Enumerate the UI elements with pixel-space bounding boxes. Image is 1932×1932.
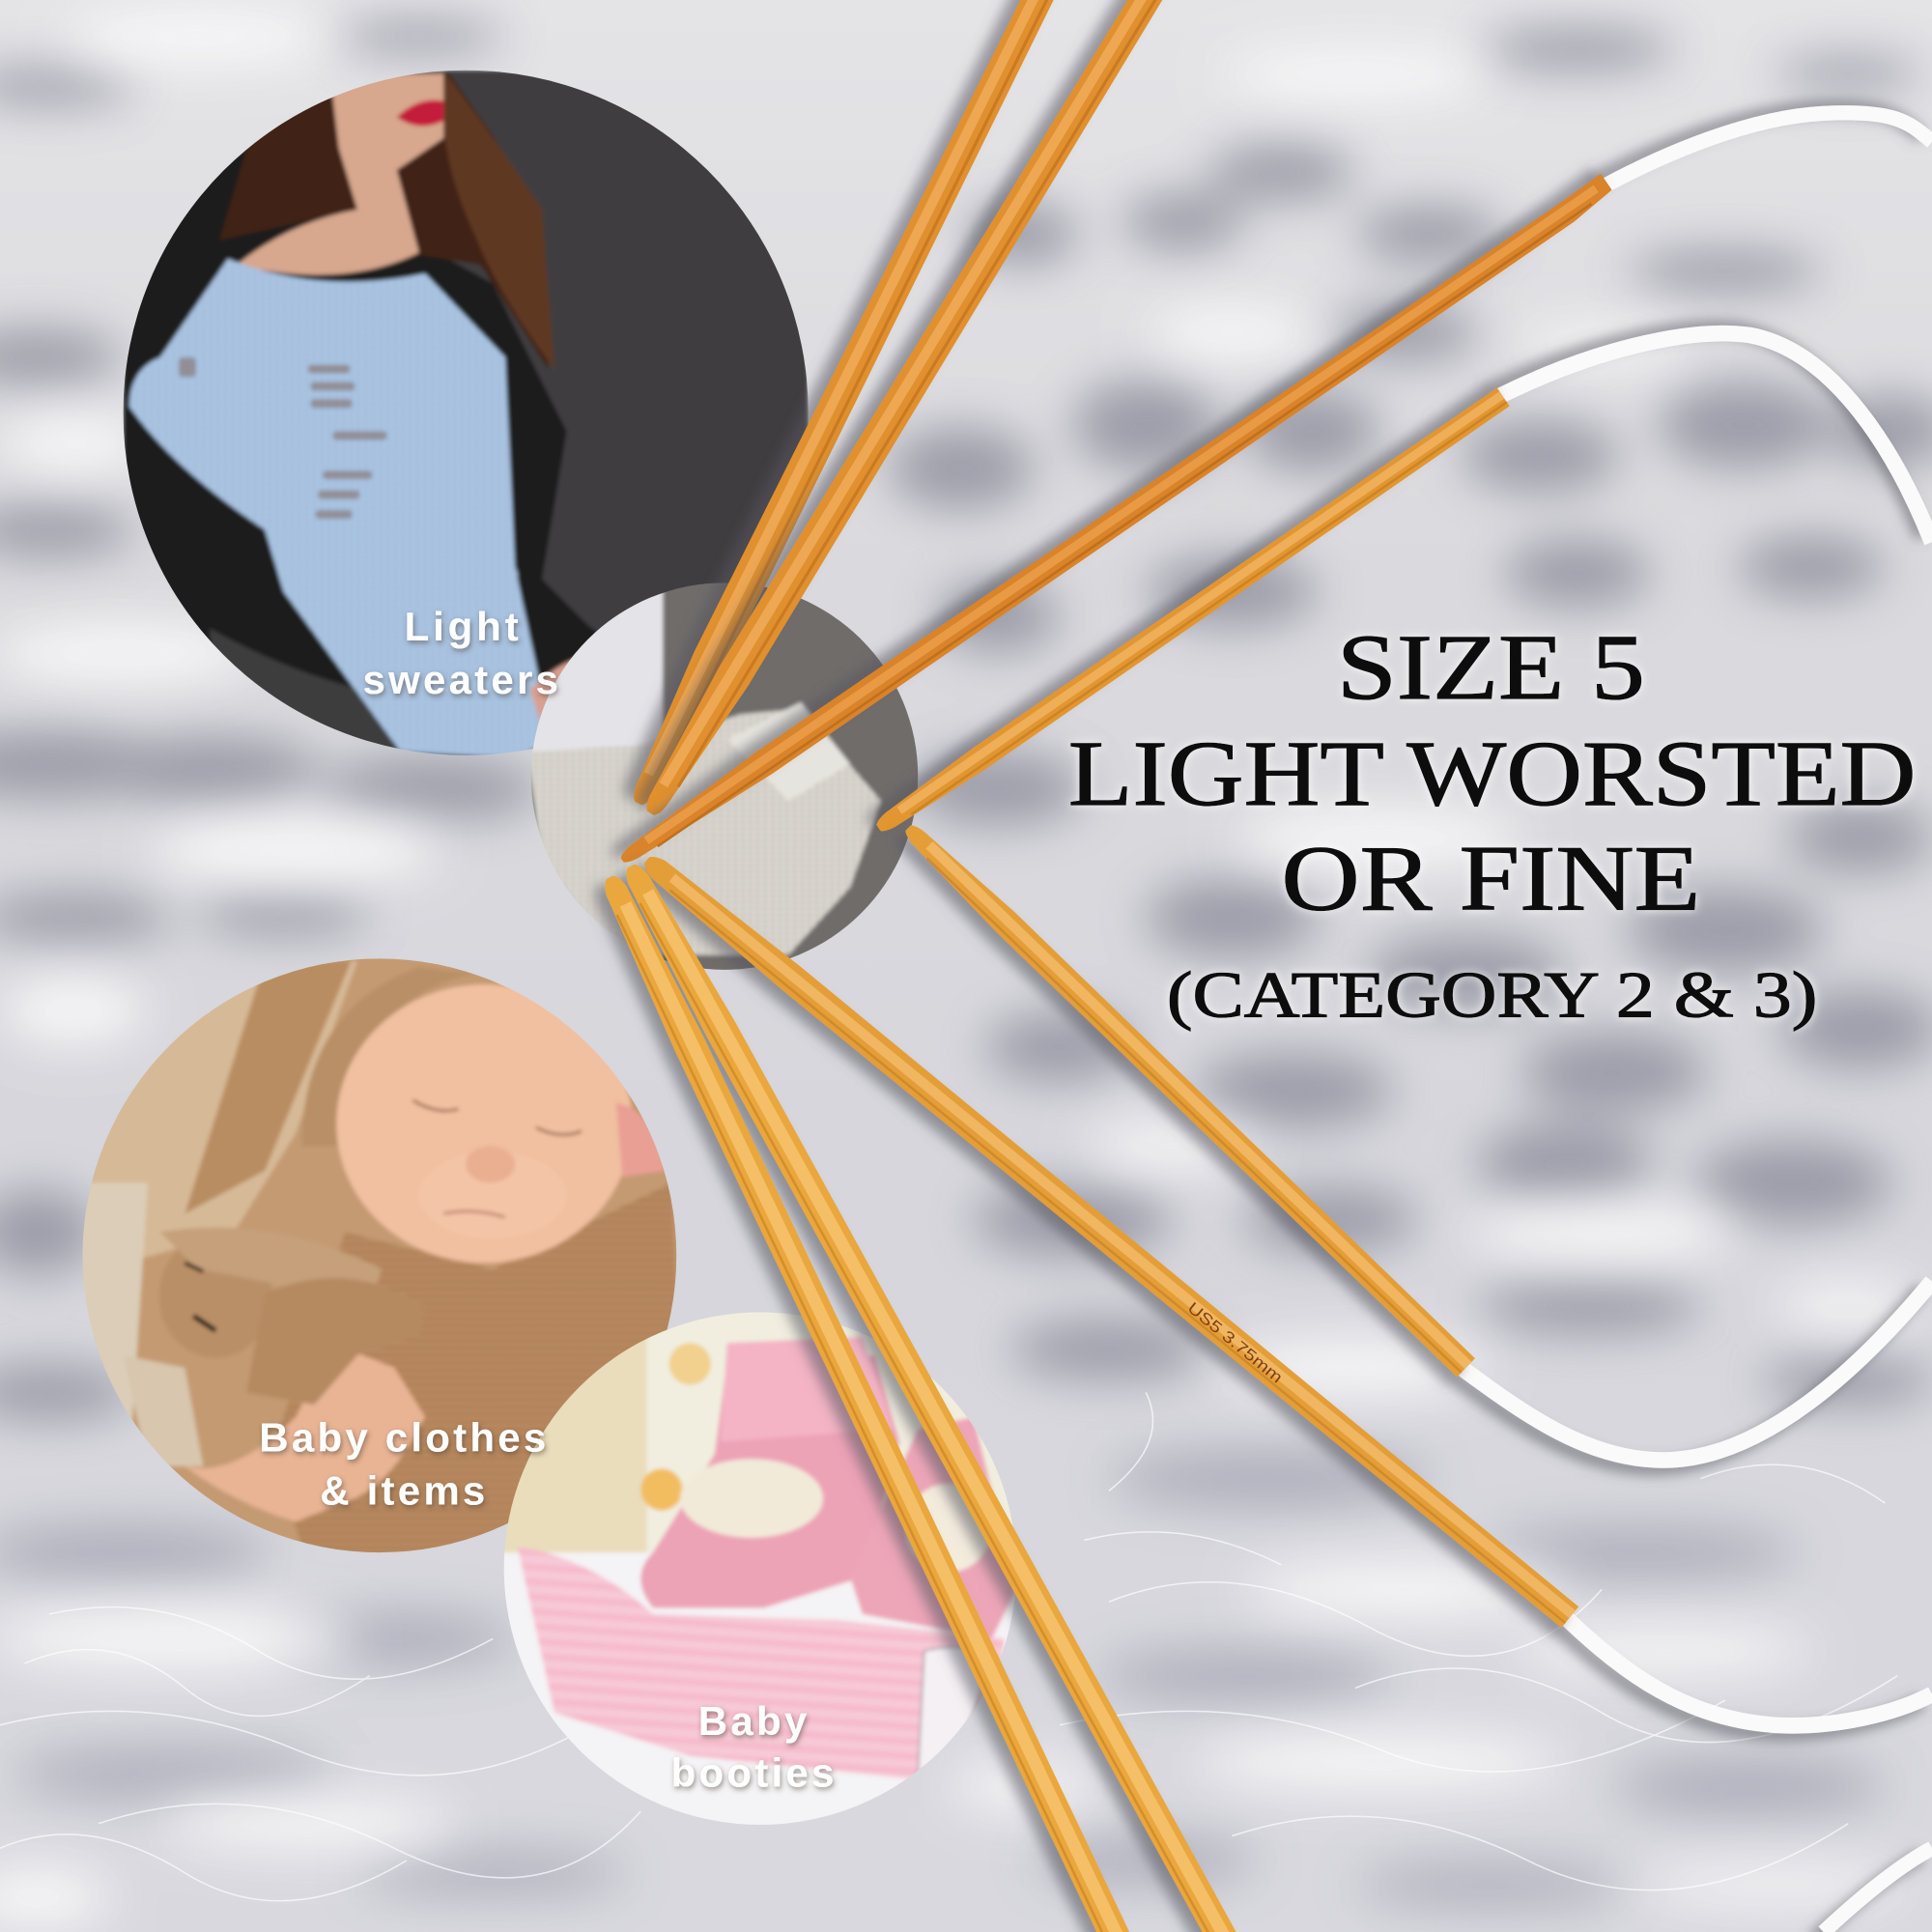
label: light sweaters [362,604,561,702]
label: baby booties: Baby [698,1698,810,1744]
cable: needle 5 [1462,1282,1932,1460]
label: baby booties [671,1698,838,1795]
title: size and category: LIGHT WORSTED [1068,722,1916,825]
photo circle: baby booties [493,1306,1023,1836]
bamboo needle 3 [614,174,1616,871]
bamboo needle 4 [871,386,1510,838]
label: light sweaters: sweaters [362,657,561,702]
cable: bottom right [1824,1848,1932,1932]
label: baby clothes and items [259,1415,549,1513]
photo circle: baby clothes and items [74,949,690,1565]
bamboo needle 1 [623,0,1059,811]
title: size and category [1068,615,1916,1031]
photo circle: knit sweater on grey [527,579,922,974]
label: baby booties: booties [671,1749,838,1795]
bamboo needle 2 [636,0,1168,822]
bamboo needle 8 [595,870,1134,1932]
photo circle: light sweaters [124,71,809,764]
title: size and category: (CATEGORY 2 & 3) [1167,958,1817,1031]
cable: needle 3 [1602,113,1932,187]
cable: needle 6 [1565,1616,1932,1725]
bamboo needle 7 [617,859,1240,1932]
bamboo needle 5 [898,818,1476,1377]
cable: needle 4 [1498,333,1932,542]
bamboo needle 6 with size marking: US5 3.75mm [1184,1298,1286,1387]
label: light sweaters: Light [405,604,523,649]
title: size and category: OR FINE [1282,826,1700,929]
bamboo needle 6 with size marking [638,848,1580,1628]
title: size and category: SIZE 5 [1337,615,1645,719]
label: baby clothes and items: & items [320,1467,489,1513]
label: baby clothes and items: Baby clothes [259,1415,549,1461]
